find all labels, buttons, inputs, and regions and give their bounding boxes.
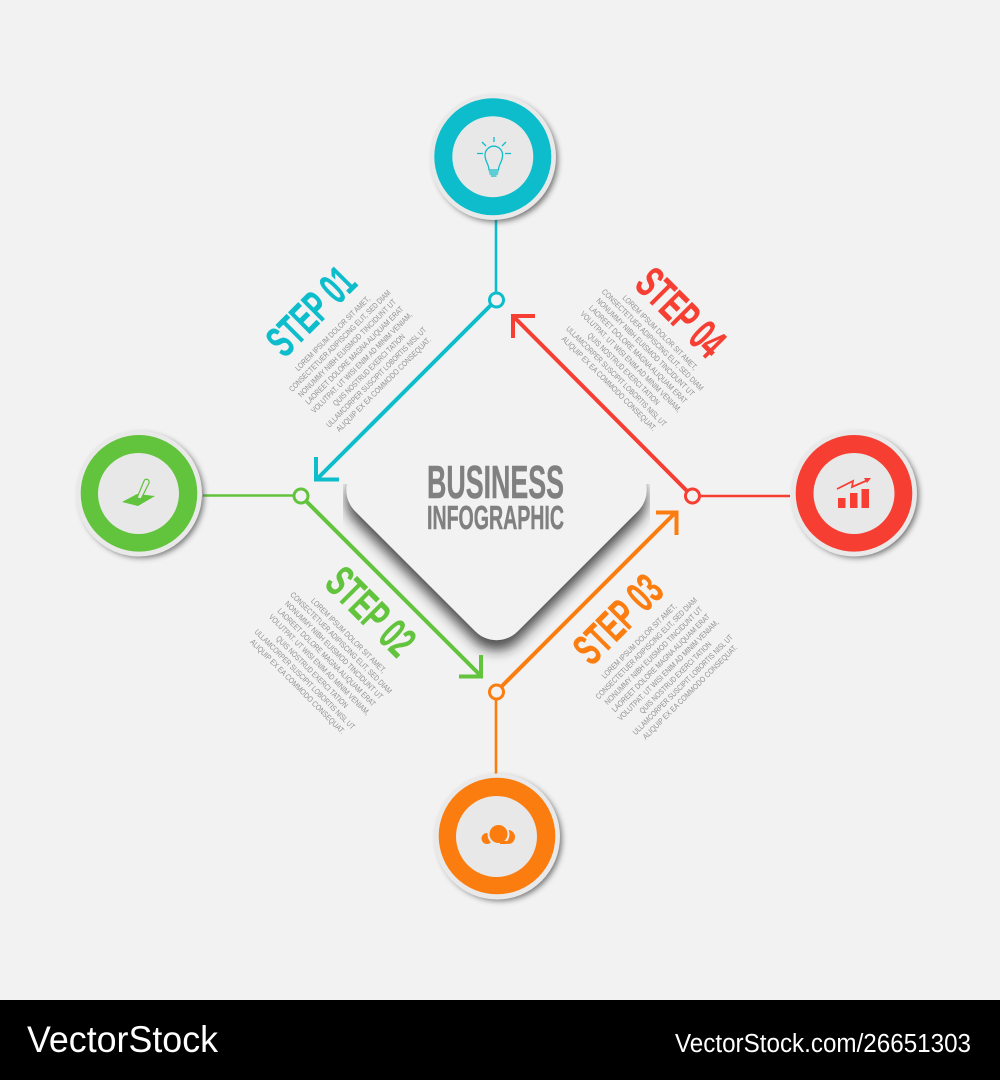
center diamond panel [343,484,650,660]
body text: step 03: QUIS NOSTRUD EXERCI TATION [638,640,714,715]
body text: step 01: LOREM IPSUM DOLOR SIT AMET, [293,294,372,373]
body text: step 04: CONSECTETUER ADIPISCING ELIT, SED DIAM [600,287,705,393]
panel: step 02 text [245,557,425,739]
body text: step 04: LOREM IPSUM DOLOR SIT AMET, [621,293,699,372]
title [427,456,564,537]
body text: step 02: LAOREET DOLORE MAGNA ALIQUAM ERAT [276,607,377,708]
body text: step 04 [556,280,713,436]
node: step 04 circle with chart icon [791,430,919,558]
body text: step 04: VOLUTPAT. UT WISI ENIM AD MINIM VENIAM, [578,309,683,414]
body text: step 03: NONUMMY NIBH EUISMOD TINCIDUNT UT [603,605,705,707]
node: step 03 circle with cloud icon [434,774,562,901]
body text: step 04: ULLAMCORPER SUSCIPIT LOBORTIS NISL UT [564,324,668,428]
heading: step 02: STEP 02 [316,557,425,666]
body text: step 01: ULLAMCORPER SUSCIPIT LOBORTIS NISL UT [324,325,428,429]
body text: step 01: VOLUTPAT. UT WISI ENIM AD MINIM VENIAM, [309,310,414,415]
body text: step 02: NONUMMY NIBH EUISMOD TINCIDUNT UT [283,599,385,701]
title: BUSINESS [427,456,564,508]
body text: step 02: LOREM IPSUM DOLOR SIT AMET, [309,596,388,675]
body text: step 02: ULLAMCORPER SUSCIPIT LOBORTIS NISL UT [253,627,357,731]
connector: step 04 red arrow [513,316,790,503]
body text: step 03: CONSECTETUER ADIPISCING ELIT, SED DIAM [594,596,699,701]
body text: step 01: CONSECTETUER ADIPISCING ELIT, SED DIAM [287,288,393,394]
connector: step 02 green arrow [203,489,481,676]
body text: step 04: NONUMMY NIBH EUISMOD TINCIDUNT UT [594,296,696,398]
body text: step 02 [245,583,401,739]
icon: pencil on paper [122,479,155,506]
body text: step 01 [280,281,436,437]
heading: step 04: STEP 04 [626,258,735,368]
body text: step 03: VOLUTPAT. UT WISI ENIM AD MINIM VENIAM, [616,618,721,723]
icon: light bulb [477,137,511,176]
heading: step 01: STEP 01 [257,257,366,366]
body text: step 02: ALIQUIP EX EA COMMODO CONSEQUAT. [248,637,347,736]
panel: step 01 text [257,257,436,437]
panel: step 03 text [564,565,743,745]
body text: step 03 [586,588,743,745]
body text: step 01: LAOREET DOLORE MAGNA ALIQUAM ERAT [304,305,405,406]
body text: step 04: ALIQUIP EX EA COMMODO CONSEQUAT. [560,334,658,433]
title: INFOGRAPHIC [427,500,564,537]
body text: step 01: QUIS NOSTRUD EXERCI TATION [331,332,407,408]
body text: step 03: LOREM IPSUM DOLOR SIT AMET, [600,602,678,680]
body text: step 02: CONSECTETUER ADIPISCING ELIT, SED DIAM [288,590,394,696]
body text: step 03: ULLAMCORPER SUSCIPIT LOBORTIS NISL UT [631,633,735,737]
footer url: VectorStock.com/26651303 [675,1030,971,1058]
icon: bar chart with arrow [837,478,871,508]
body text: step 01: NONUMMY NIBH EUISMOD TINCIDUNT UT [296,297,398,399]
icon: cloud [482,824,515,846]
body text: step 02: QUIS NOSTRUD EXERCI TATION [274,634,350,710]
footer bar [0,1000,1000,1080]
body text: step 04: LAOREET DOLORE MAGNA ALIQUAM ERAT [587,304,689,405]
body text: step 01: ALIQUIP EX EA COMMODO CONSEQUAT. [334,335,433,434]
footer brand: VectorStock [27,1019,218,1060]
body text: step 03: ALIQUIP EX EA COMMODO CONSEQUAT. [641,643,739,741]
connector: step 01 blue arrow [316,219,504,480]
body text: step 02: VOLUTPAT. UT WISI ENIM AD MINIM VENIAM, [267,612,372,717]
panel: step 04 text [556,258,735,436]
node: step 02 circle with pencil icon [76,430,204,558]
connector: step 03 orange arrow [490,512,676,774]
node: step 01 circle with bulb icon [430,94,558,222]
body text: step 04: QUIS NOSTRUD EXERCI TATION [586,331,661,407]
heading: step 03: STEP 03 [564,565,673,674]
body text: step 03: LAOREET DOLORE MAGNA ALIQUAM ERAT [610,612,712,714]
